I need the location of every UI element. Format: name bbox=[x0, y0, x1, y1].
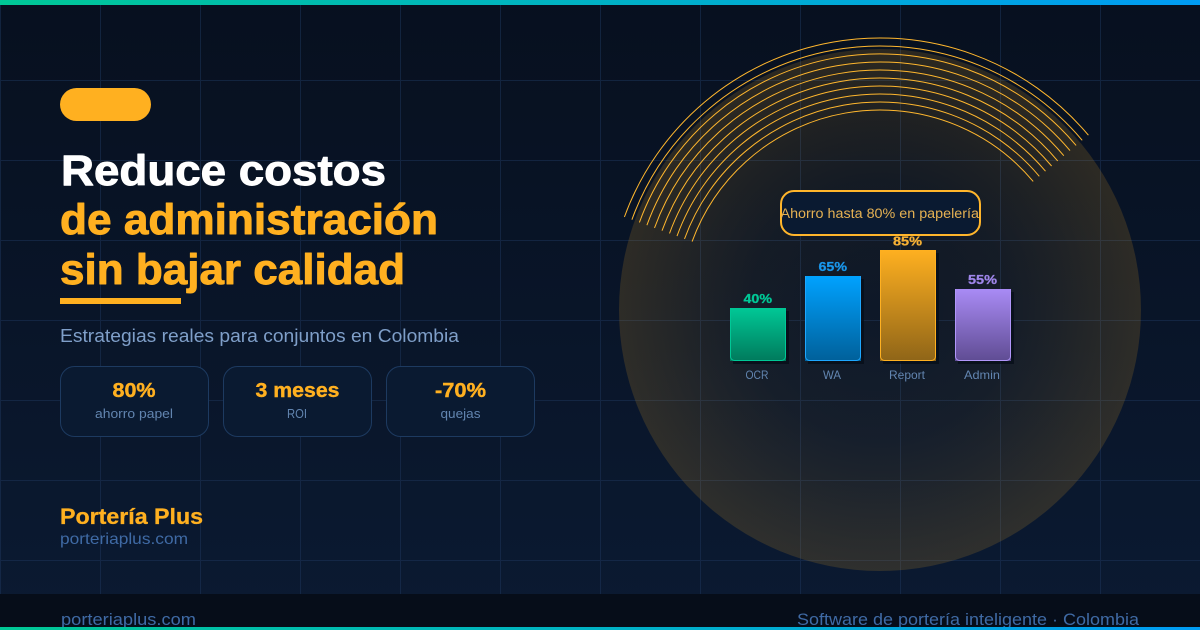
title line 3: sin bajar calidad bbox=[60, 246, 405, 294]
stat card: quejas bbox=[386, 366, 534, 436]
stat value: 80% bbox=[112, 380, 156, 402]
title bbox=[60, 147, 438, 294]
stat label: ROI bbox=[287, 406, 307, 421]
bar: OCR: OCR bbox=[746, 368, 769, 382]
bar: Admin: Admin bbox=[964, 368, 1000, 382]
footer strip bbox=[0, 594, 1200, 630]
stat label: ahorro papel bbox=[95, 406, 173, 421]
brand url: porteriaplus.com bbox=[60, 531, 188, 548]
callout bbox=[780, 191, 980, 235]
stat value: -70% bbox=[435, 380, 486, 402]
footer url: porteriaplus.com bbox=[61, 610, 196, 629]
bar chart bbox=[730, 234, 1014, 382]
callout: Ahorro hasta 80% en papelería bbox=[780, 206, 980, 221]
top accent bar bbox=[0, 0, 1200, 5]
brand block bbox=[60, 504, 203, 548]
stat label: quejas bbox=[440, 406, 481, 421]
stat value: 3 meses bbox=[256, 380, 340, 402]
badge pill bbox=[60, 88, 151, 121]
stat card: ahorro papel bbox=[60, 366, 208, 436]
stat card: ROI bbox=[224, 366, 372, 436]
bar: Report: Report bbox=[889, 368, 926, 382]
bar: Admin: 55% bbox=[968, 272, 997, 287]
title line 1: Reduce costos bbox=[61, 147, 386, 195]
bar: OCR: 40% bbox=[744, 291, 772, 306]
title line 2: de administración bbox=[60, 196, 438, 244]
brand name: Portería Plus bbox=[60, 504, 203, 529]
subtitle: Estrategias reales para conjuntos en Colombia bbox=[60, 326, 460, 346]
bar: Report: 85% bbox=[893, 234, 922, 248]
bar: OCR bbox=[730, 291, 789, 382]
decorative circle with radial glow bbox=[619, 49, 1141, 571]
bar: WA: WA bbox=[823, 368, 841, 382]
bar: WA bbox=[805, 259, 864, 382]
bottom accent bar bbox=[0, 627, 1200, 630]
title underline bbox=[60, 298, 181, 304]
concentric arcs bbox=[624, 38, 1088, 242]
bar: Admin bbox=[955, 272, 1014, 382]
footer tagline: Software de portería inteligente · Colombia bbox=[797, 610, 1140, 629]
bar: WA: 65% bbox=[818, 259, 847, 274]
bar: Report bbox=[880, 234, 939, 382]
